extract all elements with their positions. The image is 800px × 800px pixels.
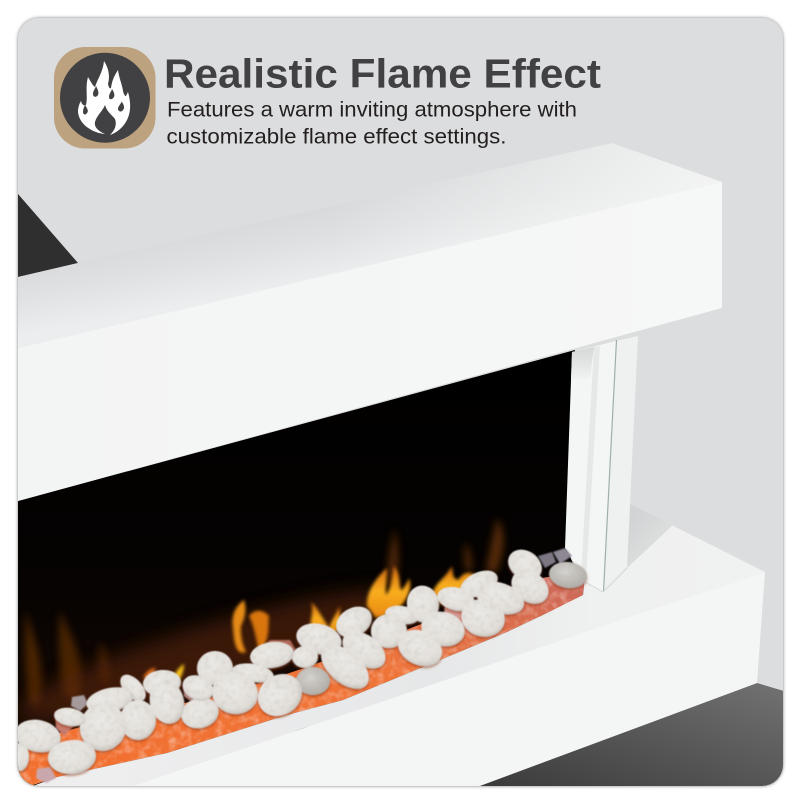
white stones: [11, 543, 589, 776]
description line 1: Features a warm inviting atmosphere with: [167, 98, 577, 122]
ember bed: [18, 576, 585, 786]
icon: flame badge: [54, 47, 156, 148]
flames: [10, 518, 504, 742]
crystal texture: [18, 576, 585, 786]
main yellow flames: [143, 566, 478, 682]
low brown glow behind the stones: [18, 582, 405, 726]
product photo: electric fireplace: [10, 143, 784, 790]
flame glyph: [78, 61, 130, 135]
badge background: [54, 47, 156, 148]
side glass pillar: [565, 336, 638, 592]
description: [166, 98, 577, 148]
title: Realistic Flame Effect: [164, 50, 601, 96]
loose crystals: [36, 548, 572, 783]
mantel top surface: [18, 143, 722, 348]
dim reflected flames: [25, 518, 504, 705]
flame inner tongues: [83, 86, 124, 115]
description line 2: customizable flame effect settings.: [166, 126, 506, 148]
mantel front face: [18, 182, 722, 501]
floor: [477, 683, 784, 787]
pillar shadow on base: [627, 504, 673, 568]
base top surface: [30, 504, 765, 787]
dark wall opening: [18, 194, 78, 277]
badge circle: [60, 53, 150, 143]
firebox interior: [18, 350, 590, 790]
base front face: [130, 572, 765, 787]
